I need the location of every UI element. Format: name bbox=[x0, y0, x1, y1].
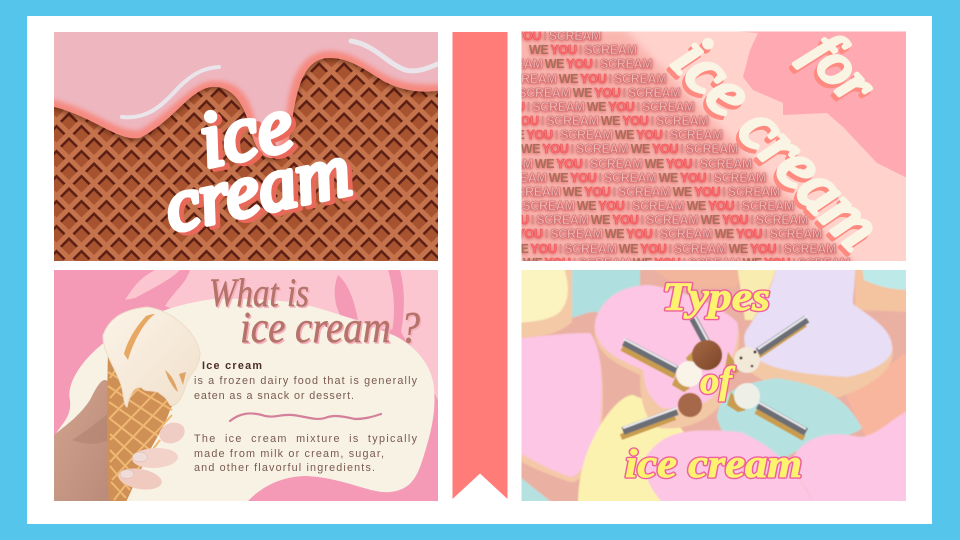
finger 2 bbox=[132, 448, 178, 468]
panel: types of ice cream bbox=[515, 265, 910, 505]
repeating text pattern: WE YOU I SCREAM WE YOU I SCREAM WE YOU I SCREAM bbox=[523, 256, 850, 270]
text: definition: Ice cream bbox=[202, 360, 262, 372]
heading: ice cream: cream bbox=[157, 128, 358, 249]
cookie: top left yellow bbox=[522, 270, 572, 338]
heading: what is bbox=[211, 278, 310, 308]
waffle cone bbox=[107, 356, 172, 501]
cookie: left pink heart bbox=[522, 370, 604, 482]
heading: types: Types bbox=[662, 274, 770, 319]
scoop: chocolate small bbox=[678, 393, 702, 417]
repeating text pattern: WE YOU I SCREAM WE YOU I SCREAM WE YOU I SCREAM bbox=[467, 199, 794, 213]
cookie: yellow bottom bbox=[578, 395, 690, 505]
pink splash bbox=[732, 31, 907, 178]
heading: what is: What is bbox=[210, 272, 310, 316]
panel: we scream for ice cream bbox=[522, 32, 906, 261]
ice cream scoop bbox=[103, 307, 200, 407]
heading: types: Types bbox=[662, 274, 770, 319]
cookie: top blue bbox=[572, 265, 640, 318]
muted base bbox=[515, 265, 910, 505]
repeating text pattern: WE YOU I SCREAM WE YOU I SCREAM bbox=[449, 72, 666, 86]
cookie: center pink heart bbox=[594, 285, 739, 428]
heading: ice cream: cream bbox=[162, 131, 362, 252]
text: mixture: The ice cream mixture is typically bbox=[194, 433, 418, 445]
cookie photo background bbox=[515, 265, 910, 505]
heading: ice cream question bbox=[242, 312, 422, 345]
cookie: bottom left blue bbox=[515, 473, 555, 505]
tan cutout shadows bbox=[672, 350, 746, 412]
cookie: top peach bbox=[647, 265, 750, 288]
melting icing bbox=[54, 32, 438, 164]
waffle background bbox=[54, 58, 438, 261]
cookie: center blue bbox=[717, 378, 862, 462]
repeating text pattern: WE YOU I SCREAM WE YOU I SCREAM WE YOU I SCREAM bbox=[425, 157, 752, 171]
repeating text pattern bbox=[522, 32, 852, 261]
heading: of: of bbox=[700, 360, 735, 402]
panel: what is ice cream bbox=[54, 270, 438, 502]
repeating text pattern: WE YOU I SCREAM WE YOU I SCREAM bbox=[477, 100, 694, 114]
scoop: chocolate chip bbox=[734, 347, 760, 373]
heading: ice cream: ice bbox=[191, 80, 300, 185]
scoop handles bbox=[621, 316, 807, 438]
text: definition: eaten as a snack or dessert. bbox=[194, 390, 354, 402]
heading: ice cream: ice cream bbox=[625, 441, 802, 486]
illustration: hand holding cone bbox=[54, 307, 200, 502]
panel: ice cream title over waffle bbox=[54, 32, 438, 261]
scoop: vanilla bbox=[676, 361, 702, 387]
ice cream scoops bbox=[621, 316, 807, 438]
cookie: bottom pink bbox=[645, 430, 815, 505]
repeating text pattern: WE YOU I SCREAM WE YOU I SCREAM bbox=[505, 128, 722, 142]
repeating text pattern: WE YOU I SCREAM WE YOU I SCREAM WE YOU I SCREAM bbox=[453, 185, 780, 199]
cookie: top right bbox=[855, 270, 906, 312]
peach background bbox=[522, 32, 906, 262]
icing highlights bbox=[122, 41, 440, 117]
scoop: white bbox=[734, 383, 760, 409]
repeating text pattern: WE YOU I SCREAM bbox=[529, 43, 637, 57]
cookie: right peach bbox=[846, 353, 906, 436]
heading: what is: What is bbox=[209, 270, 309, 315]
fingernails bbox=[120, 452, 148, 478]
heading: for: for bbox=[793, 20, 890, 116]
heading: ice cream: ice cream bbox=[625, 441, 802, 486]
heading: ice cream: ice bbox=[196, 83, 305, 188]
heading: ice cream question: ice cream ? bbox=[240, 303, 420, 352]
pink background bbox=[54, 270, 438, 501]
repeating text pattern: WE YOU I SCREAM WE YOU I SCREAM bbox=[491, 114, 708, 128]
heading: of: of bbox=[700, 360, 735, 402]
repeating text pattern: WE YOU I SCREAM WE YOU I SCREAM bbox=[435, 57, 652, 71]
heading: for bbox=[788, 36, 874, 102]
squiggle divider bbox=[230, 413, 381, 421]
repeating text pattern: WE YOU I SCREAM WE YOU I SCREAM WE YOU I SCREAM bbox=[411, 142, 738, 156]
text: mixture bbox=[194, 433, 418, 474]
scoop: chocolate large bbox=[692, 340, 722, 370]
cookie: bottom right pink bbox=[790, 410, 910, 505]
ribbon divider bbox=[452, 32, 508, 499]
heading: ice cream diagonal: ice cream bbox=[655, 25, 893, 267]
finger 1 bbox=[159, 422, 185, 444]
repeating text pattern: WE YOU I SCREAM WE YOU I SCREAM bbox=[463, 86, 680, 100]
repeating text pattern: WE YOU I SCREAM WE YOU I SCREAM WE YOU I SCREAM bbox=[495, 227, 822, 241]
light brush shapes bbox=[165, 270, 438, 400]
cream blob bbox=[54, 299, 435, 502]
repeating text pattern: WE YOU I SCREAM WE YOU I SCREAM WE YOU I SCREAM bbox=[439, 171, 766, 185]
tinted band behind text bbox=[522, 32, 854, 261]
text: mixture: and other flavorful ingredients. bbox=[194, 462, 375, 474]
repeating text pattern: WE YOU I SCREAM WE YOU I SCREAM WE YOU I SCREAM bbox=[481, 213, 808, 227]
cookie: lavender heart bbox=[744, 265, 893, 397]
repeating text pattern: YOU I SCREAM bbox=[515, 29, 601, 43]
heading: ice cream question: ice cream ? bbox=[242, 304, 422, 354]
text: definition bbox=[194, 362, 417, 399]
heading: ice cream diagonal: ice cream bbox=[658, 21, 896, 263]
text: definition: is a frozen dairy food that is generally bbox=[194, 375, 418, 387]
hand palm bbox=[54, 380, 112, 502]
text: mixture: made from milk or cream, sugar, bbox=[194, 448, 384, 460]
heading: for: for bbox=[790, 24, 887, 120]
repeating text pattern: WE YOU I SCREAM WE YOU I SCREAM WE YOU I SCREAM bbox=[509, 242, 836, 256]
finger 3 bbox=[118, 468, 162, 490]
